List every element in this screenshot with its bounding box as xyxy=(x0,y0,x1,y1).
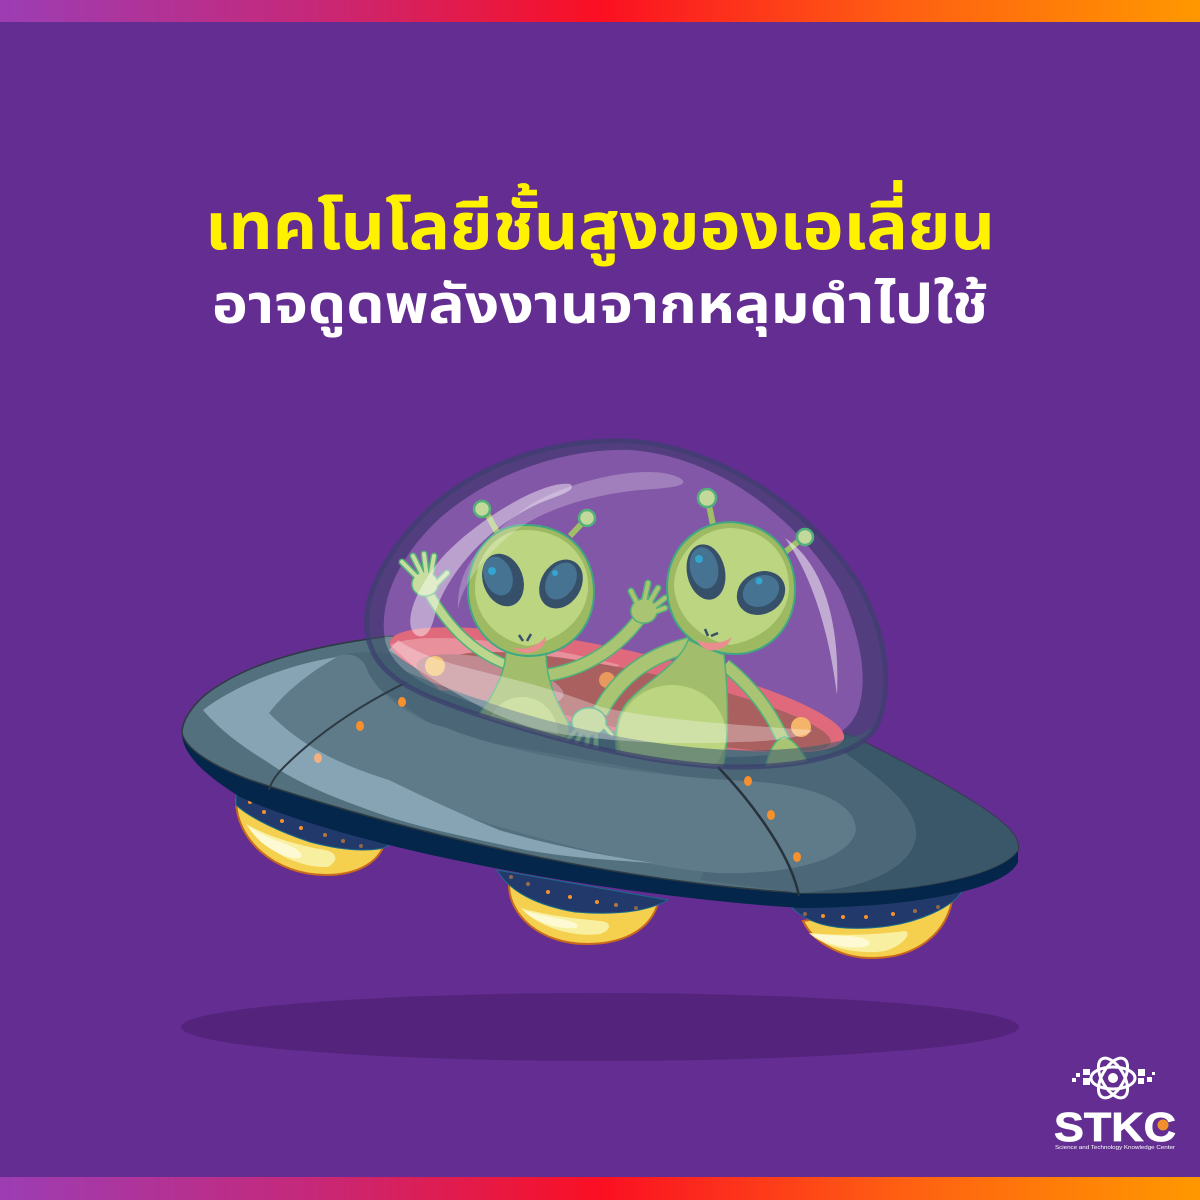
top gradient bar xyxy=(0,0,1200,22)
logo tagline: Science and Technology Knowledge Center xyxy=(1055,1145,1175,1151)
arms xyxy=(600,645,690,712)
landing pod left xyxy=(236,788,400,875)
body tone xyxy=(269,654,856,873)
alien right xyxy=(565,489,813,785)
ground shadow xyxy=(181,993,1019,1061)
saucer top deck xyxy=(182,636,1018,893)
bright highlight xyxy=(203,657,653,863)
logo atom icon xyxy=(1091,1053,1135,1103)
right streak highlight xyxy=(785,538,837,695)
dome outer band xyxy=(366,441,886,767)
hand raised left xyxy=(402,554,447,597)
body xyxy=(478,652,571,742)
panel seam right xyxy=(718,767,799,896)
face xyxy=(705,629,718,636)
logo pixels xyxy=(1072,1069,1155,1085)
panel seam left xyxy=(269,682,407,790)
logo wordmark: STKC xyxy=(1054,1104,1176,1150)
eyes xyxy=(482,554,524,606)
dome inner glass xyxy=(384,450,863,757)
hand raised right xyxy=(630,583,665,624)
right mid tone lobe xyxy=(708,754,916,893)
face xyxy=(519,634,531,641)
dome outline xyxy=(366,441,886,767)
deck shading xyxy=(203,652,1030,900)
upper band around dome xyxy=(348,652,747,780)
landing pod right xyxy=(787,890,963,958)
illustration: flying saucer xyxy=(182,441,1030,958)
alien left xyxy=(402,501,665,775)
dome front glass xyxy=(366,441,886,767)
subheading: white: อาจดูดพลังงานจากหลุมดำไปใช้ xyxy=(212,267,988,348)
large arc highlight xyxy=(458,472,683,610)
logo: STKC xyxy=(1054,1053,1176,1151)
body xyxy=(616,640,728,772)
title xyxy=(205,179,995,348)
headline: yellow: เทคโนโลยีชั้นสูงของเอเลี่ยน xyxy=(205,179,995,279)
head xyxy=(468,525,594,656)
floor shadow through glass xyxy=(372,650,877,767)
pod lights xyxy=(248,800,940,919)
deck lights xyxy=(314,697,801,862)
logo orange dot xyxy=(1158,1120,1168,1130)
dome back glass xyxy=(366,441,886,767)
hand on rim left xyxy=(565,707,612,750)
cockpit red interior xyxy=(390,627,844,752)
aliens xyxy=(402,489,813,785)
dark right side xyxy=(792,734,1018,894)
hand on rim right xyxy=(765,736,808,766)
antennae xyxy=(706,506,800,554)
arms xyxy=(430,595,505,664)
lower reflective band xyxy=(389,640,812,743)
saucer dark rim xyxy=(182,730,1018,908)
landing pod middle xyxy=(497,870,668,944)
antennae xyxy=(485,510,587,536)
eyes xyxy=(686,544,726,600)
head xyxy=(667,522,795,654)
bottom gradient bar xyxy=(0,1177,1200,1200)
